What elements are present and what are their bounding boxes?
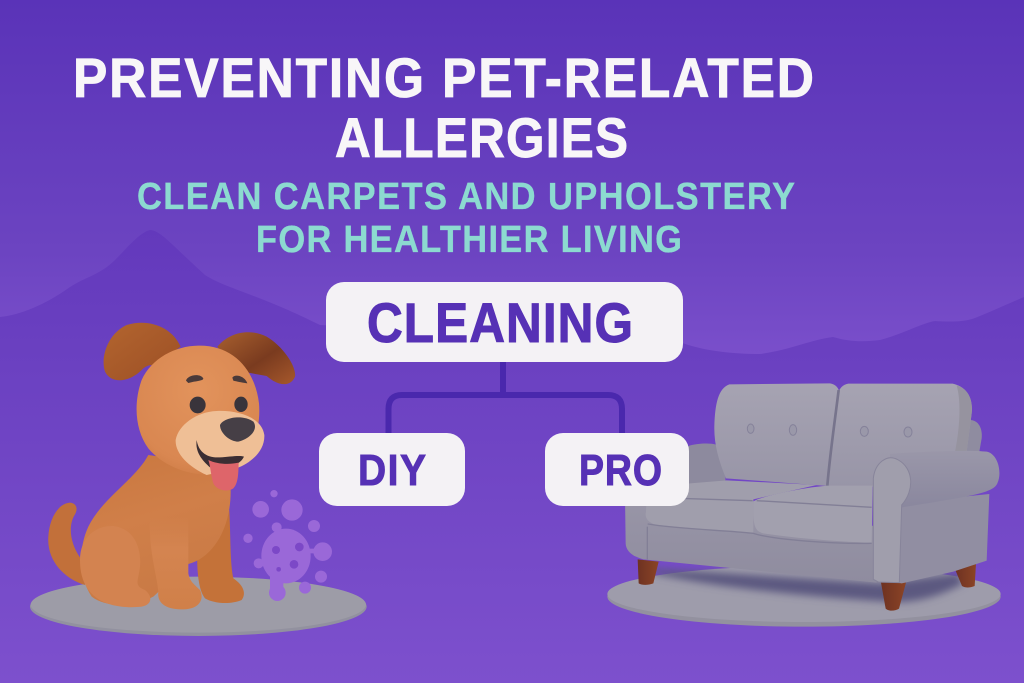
front leg: [881, 583, 906, 611]
haunch: [80, 526, 150, 607]
right eyebrow: [232, 376, 247, 383]
subtitle: FOR HEALTHIER LIVING: [256, 217, 682, 260]
cushion seam: [827, 390, 839, 486]
right ear: [217, 332, 295, 384]
title: [73, 47, 814, 170]
sofa base front: [625, 483, 877, 583]
body: [81, 455, 231, 605]
floor shadow: [653, 568, 963, 602]
sofa platform: [607, 566, 1001, 627]
right eye: [234, 397, 248, 412]
box: PRO: [545, 433, 689, 506]
nose: [220, 417, 255, 442]
muzzle: [176, 411, 264, 475]
mouth: [196, 440, 244, 467]
title: PREVENTING PET-RELATED: [73, 47, 814, 109]
arm roll: [887, 451, 999, 507]
virus particle: [254, 522, 332, 601]
box: PRO: PRO: [579, 446, 662, 495]
cushion buttons: [747, 424, 912, 437]
right back cushion: [827, 384, 972, 487]
left eyebrow: [186, 375, 203, 383]
box: cleaning: [326, 282, 683, 362]
left back leg: [638, 559, 659, 585]
subtitle: [137, 174, 795, 260]
seat piping: [647, 497, 872, 559]
sofa illustration: [607, 383, 1001, 627]
far back cushion sliver: [965, 420, 982, 453]
head: [137, 346, 259, 474]
dog illustration: [30, 323, 367, 636]
allergen cluster: [243, 490, 332, 601]
arm front panel: [873, 458, 911, 583]
right seat cushion: [753, 486, 873, 543]
box: DIY: [319, 433, 465, 506]
mountain silhouette: [0, 230, 1024, 683]
head with ears: [104, 323, 295, 490]
far foreleg: [197, 510, 244, 603]
left seat cushion: [646, 480, 817, 534]
front leg: [150, 517, 202, 609]
left arm: [677, 444, 725, 493]
right arm side: [893, 494, 989, 583]
tongue: [208, 460, 239, 490]
left ear: [104, 323, 181, 380]
left back cushion: [714, 383, 839, 486]
subtitle: CLEAN CARPETS AND UPHOLSTERY: [137, 174, 795, 217]
right back leg: [955, 563, 976, 587]
connector lines: [388, 362, 622, 433]
dog platform: [30, 577, 367, 636]
right cushion side shade: [955, 385, 972, 452]
left eye: [190, 397, 206, 413]
tail: [48, 503, 85, 585]
box: cleaning: CLEANING: [367, 292, 633, 355]
title: ALLERGIES: [335, 107, 628, 170]
box: DIY: DIY: [358, 446, 426, 494]
